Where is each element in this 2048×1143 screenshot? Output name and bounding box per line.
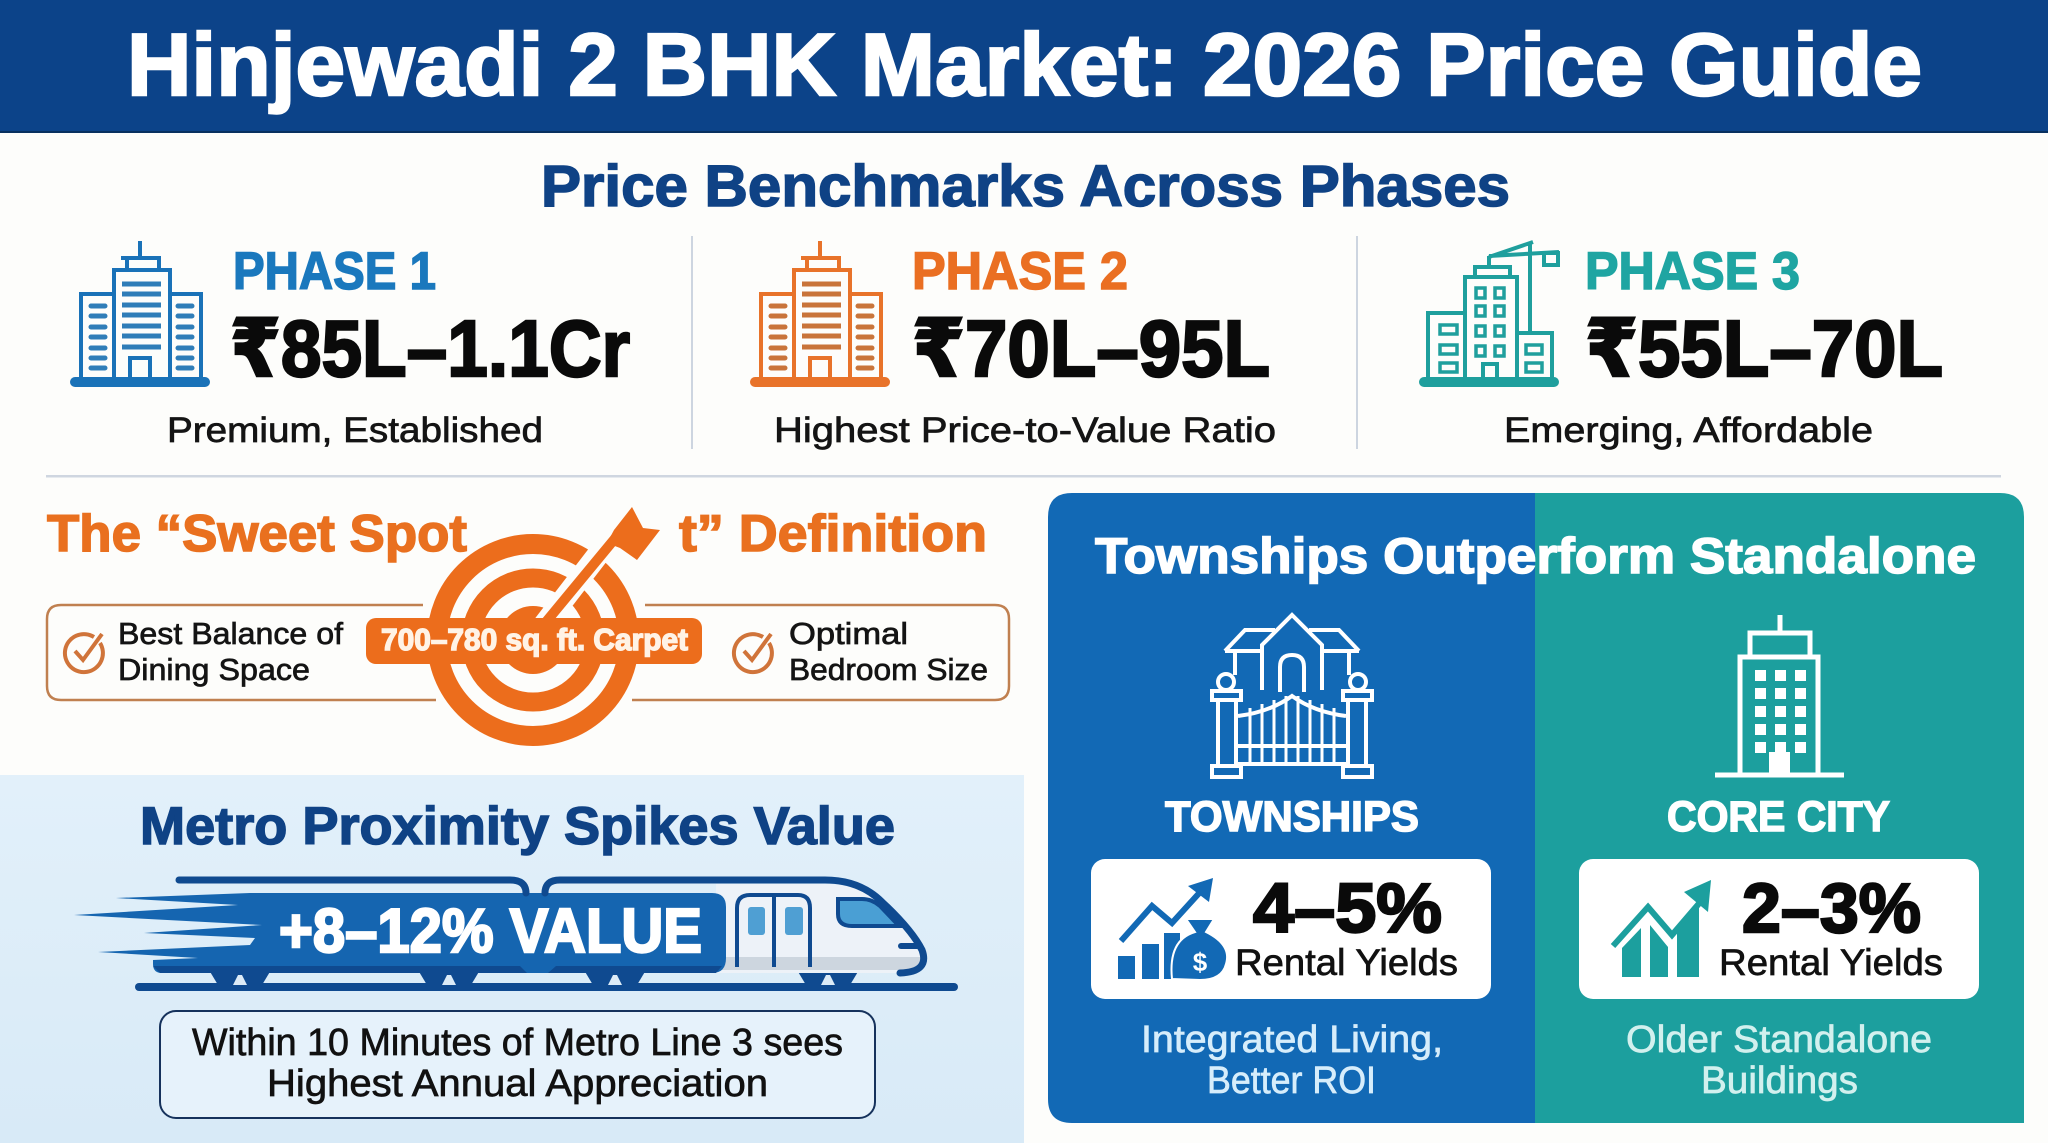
- text: dining space: [118, 616, 343, 687]
- callout: line 3 appreciation: Highest Annual Appreciation: [267, 1063, 768, 1105]
- icon: rising chart: [1613, 880, 1711, 977]
- heading: sweet spot, right part: t” Definition: [679, 505, 987, 563]
- label: rental yields: Rental Yields: [1719, 942, 1943, 983]
- text: dining space: Dining Space: [118, 652, 310, 687]
- value: 2-3%: 2–3%: [1742, 869, 1921, 947]
- heading: sweet spot, left part: The “Sweet Spot: [47, 505, 467, 563]
- caption: integrated living: Better ROI: [1207, 1060, 1376, 1102]
- label: phase 2: PHASE 2: [912, 242, 1128, 301]
- text: bedroom size: [789, 616, 988, 687]
- label: core city: CORE CITY: [1667, 793, 1890, 841]
- value: 4-5%: 4–5%: [1253, 869, 1442, 947]
- value label: +8–12% VALUE: [279, 897, 702, 966]
- icon: left check: [65, 634, 103, 672]
- icon: standalone building: [1715, 615, 1844, 775]
- panel: phase 3: [1421, 242, 1943, 450]
- panel: phase 2: [752, 241, 1276, 450]
- panel: phase 1: [72, 241, 630, 450]
- heading: price benchmarks: Price Benchmarks Across Phases: [541, 154, 1510, 219]
- icon: chart and money bag: [1118, 878, 1227, 980]
- title banner: Hinjewadi 2 BHK Market: 2026 Price Guide: [127, 15, 1922, 114]
- card: core city yield: [1579, 859, 1979, 999]
- panel: metro proximity: [0, 775, 1024, 1143]
- text: dining space: Best Balance of: [118, 616, 343, 651]
- heading: townships outperform: Townships Outperform Standalone: [1095, 528, 1976, 584]
- caption: older standalone: Buildings: [1701, 1060, 1858, 1102]
- label: phase 1: PHASE 1: [233, 242, 436, 301]
- caption: phase 1: Premium, Established: [167, 411, 543, 450]
- icon: chart and money bag: $: [1193, 947, 1208, 977]
- outlined box: [47, 605, 1009, 700]
- panel: sweet spot definition: [47, 505, 1009, 736]
- title banner: [0, 0, 2048, 133]
- icon: phase 1 building: [72, 241, 208, 385]
- caption: phase 3: Emerging, Affordable: [1504, 411, 1873, 450]
- icon: target with arrow: [437, 507, 660, 736]
- panel: townships vs core city: [1048, 493, 2024, 1123]
- callout: line 3 appreciation: [160, 1011, 875, 1118]
- card: township yield: [1091, 859, 1491, 999]
- icon: right check: [734, 634, 772, 672]
- icon: phase 3 building with crane: [1421, 242, 1559, 385]
- divider: [1356, 236, 1358, 449]
- caption: phase 2: Highest Price-to-Value Ratio: [774, 411, 1276, 450]
- pill: carpet size: 700–780 sq. ft. Carpet: [381, 622, 688, 657]
- price: phase 3: ₹55L–70L: [1585, 304, 1943, 393]
- caption: older standalone: Older Standalone: [1626, 1019, 1932, 1061]
- text: bedroom size: Bedroom Size: [789, 652, 988, 687]
- caption: integrated living: [1141, 1019, 1443, 1102]
- caption: older standalone: [1626, 1019, 1932, 1102]
- icon: gated township: [1212, 615, 1372, 777]
- heading: metro: Metro Proximity Spikes Value: [140, 797, 895, 856]
- label: phase 3: PHASE 3: [1585, 242, 1800, 301]
- divider: [691, 236, 693, 449]
- label: townships: TOWNSHIPS: [1165, 793, 1419, 841]
- caption: integrated living: Integrated Living,: [1141, 1019, 1443, 1061]
- price: phase 1: ₹85L–1.1Cr: [230, 304, 630, 393]
- train illustration: [74, 880, 958, 991]
- icon: phase 2 building: [752, 241, 888, 385]
- label: rental yields: Rental Yields: [1235, 942, 1458, 983]
- price: phase 2: ₹70L–95L: [912, 304, 1270, 393]
- text: bedroom size: Optimal: [789, 616, 908, 651]
- callout: line 3 appreciation: Within 10 Minutes of Metro Line 3 sees: [192, 1022, 843, 1064]
